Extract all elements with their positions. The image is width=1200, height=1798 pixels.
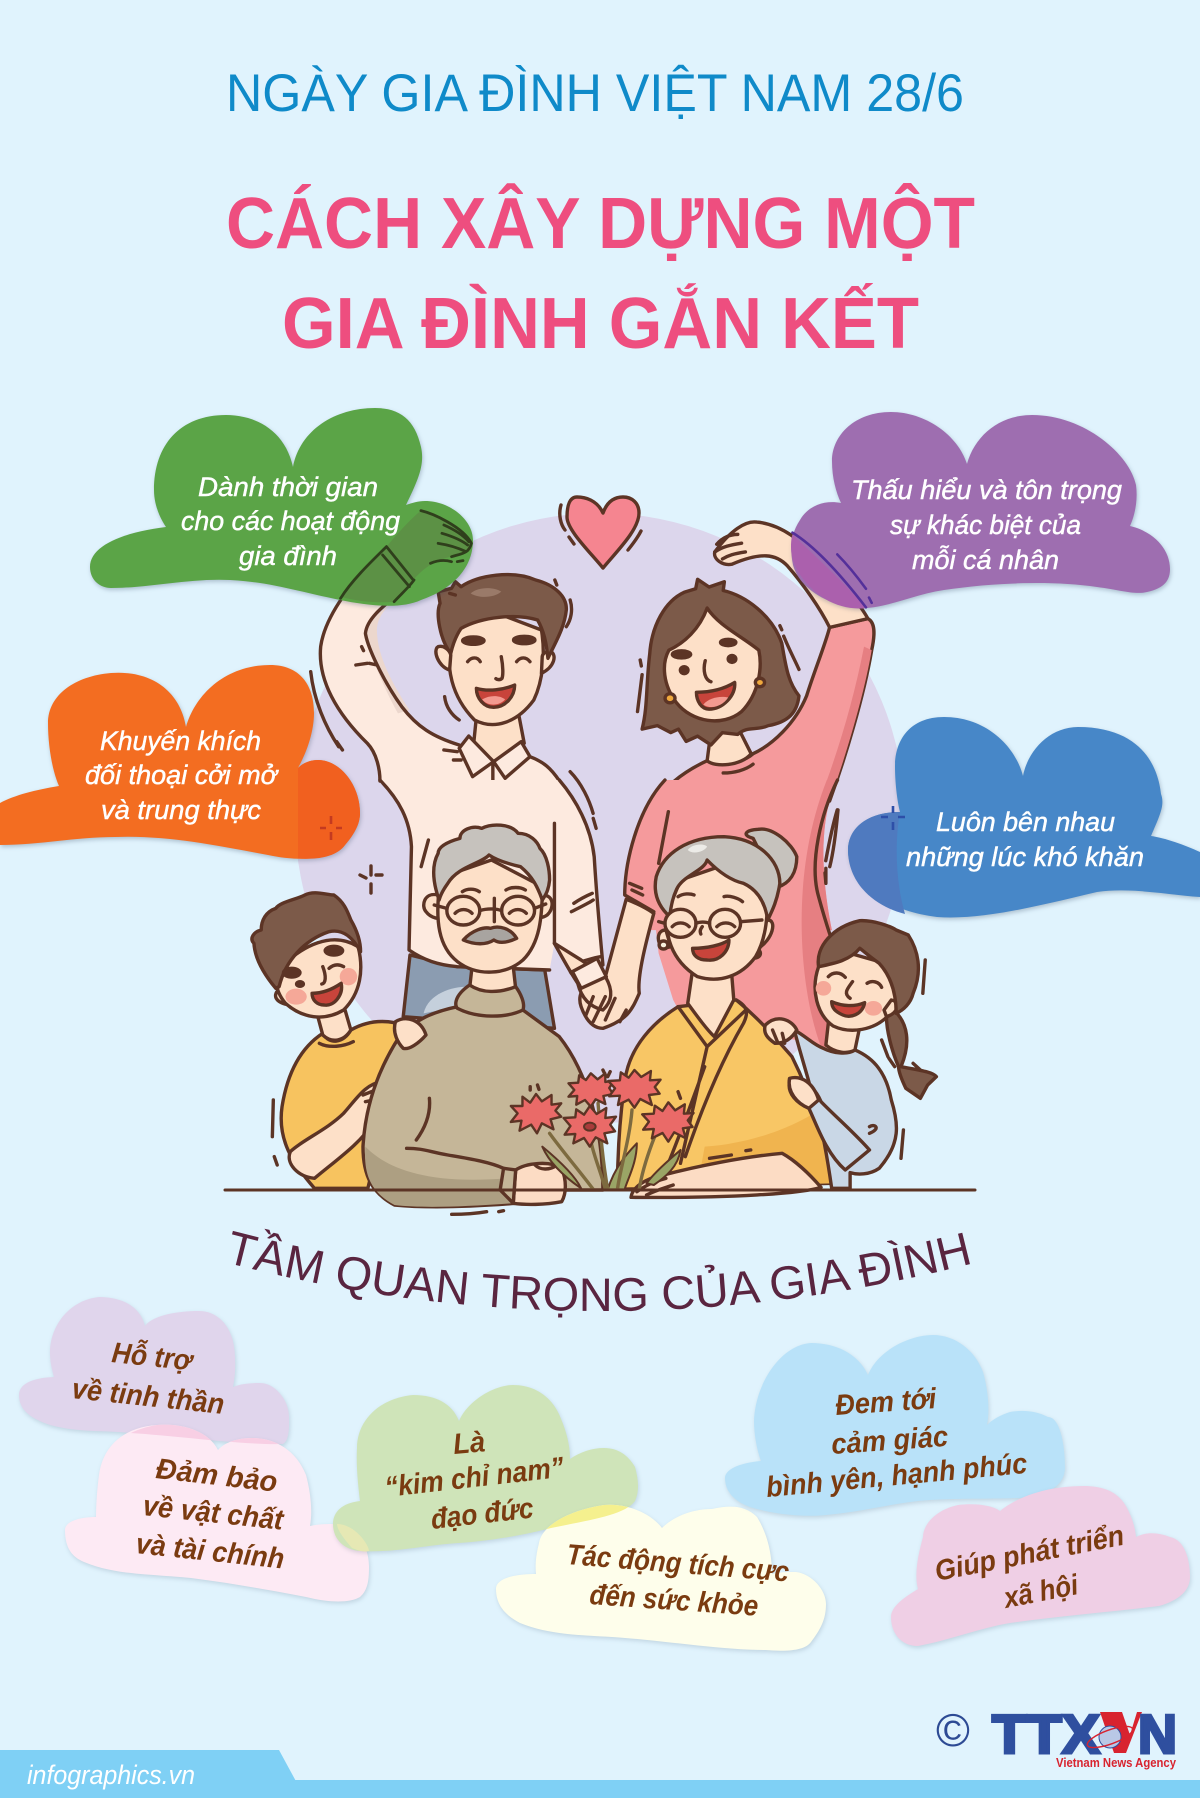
logo: TTXVN: Vietnam News Agency — [1056, 1756, 1176, 1770]
father's forearm and cuff — [554, 943, 611, 1010]
blob: spend time together: Dành thời gian — [198, 472, 378, 502]
grandfather hair — [434, 825, 550, 900]
illustration: family group — [225, 497, 975, 1214]
boy hand on grandfather — [394, 1019, 426, 1049]
man hair — [438, 575, 566, 658]
footer band and tab — [0, 1750, 1200, 1798]
cloud: positive health impact: Tác động tích cực — [565, 1539, 790, 1588]
arm seen through green blob — [341, 511, 471, 602]
grandmother lapels — [668, 1000, 747, 1163]
man pants, lower shirt and mother's lower body — [380, 780, 855, 1053]
girl hand on grandmother — [765, 1019, 797, 1043]
blob: stay together in hard times — [848, 717, 1200, 917]
man ears — [436, 646, 554, 673]
cloud: material support: về vật chất — [141, 1490, 286, 1537]
flower stems and leaves — [542, 1143, 680, 1189]
woman earrings — [665, 694, 675, 703]
grandfather ears — [424, 895, 552, 918]
logo: TTXVN: N — [1138, 1703, 1177, 1765]
grandmother neck — [688, 970, 734, 1037]
cloud: social development — [891, 1486, 1190, 1646]
title: main pink heading: CÁCH XÂY DỰNG MỘT — [226, 183, 975, 264]
blob: open dialogue: và trung thực — [101, 795, 261, 825]
woman hair — [642, 579, 799, 745]
blob: spend time together: gia đình — [239, 541, 337, 571]
title: national day heading: NGÀY GIA ĐÌNH VIỆT NAM 28/6 — [226, 64, 964, 123]
grandfather face — [438, 860, 542, 972]
blob: spend time together — [90, 408, 473, 606]
grandfather sweater — [363, 1007, 603, 1207]
blob: open dialogue: đối thoại cởi mở — [85, 760, 280, 790]
grandmother bun — [746, 829, 797, 887]
grandmother face — [667, 867, 768, 979]
woman features — [672, 651, 691, 658]
logo globe — [1099, 1726, 1121, 1748]
grandmother mouth — [693, 940, 729, 960]
sparkle seen through blob — [881, 806, 905, 830]
cloud: moral compass: Là — [452, 1426, 486, 1461]
woman raised arm — [715, 522, 868, 627]
boy features — [325, 946, 343, 955]
cloud: material support: Đảm bảo — [154, 1453, 279, 1499]
woman face — [664, 608, 760, 721]
blob: open dialogue: Khuyến khích — [100, 726, 261, 756]
cloud: social development: xã hội — [999, 1569, 1082, 1615]
cloud: peace and happiness — [725, 1335, 1065, 1516]
grandmother forearm — [631, 1153, 821, 1197]
overlap tint — [131, 1424, 278, 1444]
cloud: positive health impact: đến sức khỏe — [589, 1579, 759, 1623]
man neck — [474, 713, 524, 762]
mother's arm and joined hands — [580, 899, 654, 1028]
cloud: peace and happiness: Đem tới — [834, 1383, 938, 1422]
girl ear — [884, 1000, 897, 1017]
logo: TTXVN — [992, 1703, 1177, 1770]
cloud: emotional support — [19, 1297, 289, 1444]
cloud: material support: và tài chính — [134, 1528, 286, 1576]
boy — [252, 893, 400, 1188]
cloud: peace and happiness: cảm giác — [830, 1421, 949, 1461]
sparkle — [360, 866, 382, 893]
grandfather moustache — [463, 927, 517, 944]
grandfather glasses — [447, 896, 480, 925]
blob: open dialogue — [0, 665, 360, 859]
overlap tint — [337, 1524, 369, 1551]
grandmother glasses — [665, 909, 696, 937]
grandfather collar — [456, 985, 524, 1016]
girl arm — [789, 1080, 869, 1170]
grandmother robe — [617, 1000, 832, 1189]
grandfather neck — [470, 967, 516, 993]
cloud: moral compass: “kim chỉ nam” — [383, 1452, 566, 1504]
boy neck — [317, 1010, 351, 1040]
girl lower hand — [789, 1078, 819, 1108]
grandmother — [617, 829, 832, 1197]
man face — [449, 613, 543, 724]
girl braid — [886, 1010, 936, 1098]
grandmother ears and earrings — [658, 920, 773, 948]
cloud: positive health impact — [496, 1505, 826, 1651]
girl features — [828, 973, 882, 998]
overlap tint — [546, 1504, 628, 1530]
footer website text: infographics.vn — [27, 1760, 195, 1790]
logo: TTXVN: TTX — [992, 1703, 1100, 1765]
boy ear — [276, 988, 293, 1005]
table line — [225, 1188, 975, 1192]
man eyes, nose, mouth — [468, 657, 530, 680]
mother lower body and sleeve — [625, 780, 853, 1053]
blob: understand differences: mỗi cá nhân — [912, 544, 1059, 575]
flower heads — [511, 1070, 694, 1147]
blob: understand differences: sự khác biệt của — [890, 510, 1081, 540]
heart icon — [560, 497, 641, 568]
girl sweater — [794, 1030, 896, 1188]
mother's arm seen through purple blob — [791, 533, 872, 609]
boy face — [277, 940, 361, 1017]
cloud: material support — [65, 1425, 369, 1602]
cloud: social development: Giúp phát triển — [932, 1520, 1127, 1588]
cloud: moral compass — [333, 1385, 638, 1551]
title: main pink heading: GIA ĐÌNH GẮN KẾT — [282, 283, 919, 364]
blob: stay together in hard times: những lúc khó khăn — [906, 842, 1144, 872]
cloud: emotional support: về tinh thần — [70, 1373, 226, 1421]
cloud: peace and happiness: bình yên, hạnh phúc — [765, 1448, 1029, 1504]
boy hair — [252, 893, 361, 988]
girl face — [815, 953, 896, 1030]
blob: spend time together: cho các hoạt động — [181, 506, 400, 536]
girl — [394, 921, 936, 1188]
background lavender circle — [295, 513, 905, 1123]
boy yellow shirt — [281, 1021, 400, 1188]
cloud: moral compass: đạo đức — [429, 1493, 535, 1536]
man: father upper body — [311, 547, 593, 880]
woman: mother upper body — [619, 522, 874, 930]
sparkle seen through blob — [320, 816, 342, 840]
woman neck — [707, 731, 751, 765]
man collar — [459, 736, 530, 778]
copyright symbol: © — [936, 1704, 970, 1756]
grandfather fist — [513, 1163, 565, 1204]
boy arm — [289, 1082, 384, 1178]
cloud: emotional support: Hỗ trợ — [110, 1335, 196, 1378]
girl neck — [826, 1023, 860, 1052]
blob: stay together in hard times: Luôn bên nhau — [936, 807, 1115, 837]
blob: understand differences — [791, 412, 1170, 609]
flower bouquet — [511, 1070, 694, 1189]
title: main pink heading — [226, 183, 975, 364]
grandfather — [363, 825, 603, 1214]
blob: understand differences: Thấu hiểu và tôn trọng — [851, 475, 1122, 505]
grandmother hair — [655, 837, 780, 920]
curved heading: importance of family: TẦM QUAN TRỌNG CỦA GIA ĐÌNH — [232, 1228, 970, 1318]
girl hair — [818, 921, 918, 1013]
